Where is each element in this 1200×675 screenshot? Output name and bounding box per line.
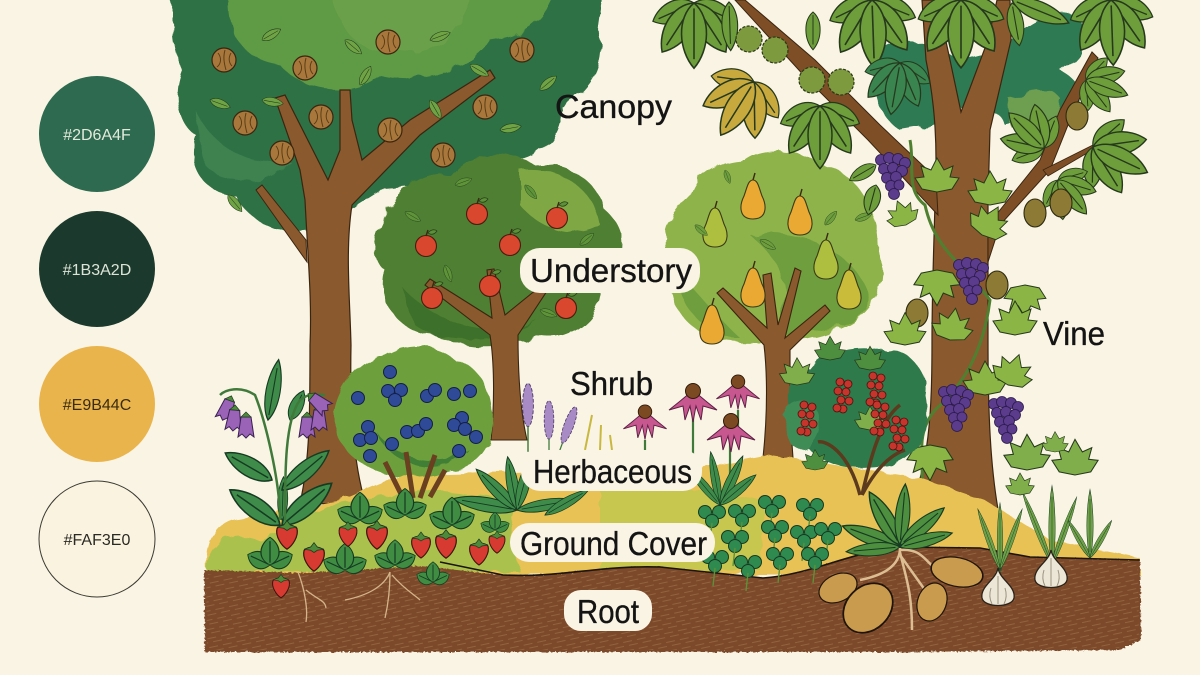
dark foliage behind tree bbox=[875, 14, 1085, 130]
pear tree crown bbox=[663, 151, 882, 343]
coneflower blooms bbox=[623, 375, 760, 452]
strawberry leaves bbox=[244, 489, 511, 587]
blueberry shrub bbox=[335, 346, 492, 498]
label: Herbaceous: Herbaceous bbox=[533, 453, 692, 490]
potato plant bbox=[814, 483, 986, 643]
swatch: #1B3A2D: #1B3A2D bbox=[63, 262, 131, 279]
strawberries bbox=[273, 521, 505, 598]
soil root layer bbox=[204, 547, 1141, 652]
clover ground cover bbox=[698, 496, 842, 591]
label: Canopy: Canopy bbox=[555, 88, 673, 125]
apple tree trunk bbox=[425, 269, 547, 440]
swatch: #FAF3E0 bbox=[39, 481, 155, 597]
swatch: #FAF3E0: #FAF3E0 bbox=[64, 532, 130, 549]
blueberry stems bbox=[385, 452, 445, 498]
label: Shrub: Shrub bbox=[570, 365, 653, 402]
red currant shrub bbox=[779, 336, 927, 495]
label: Root: Root bbox=[577, 593, 639, 630]
red currants bbox=[797, 372, 909, 451]
comfrey leaves bbox=[221, 358, 338, 533]
swatch: #E9B44C bbox=[39, 346, 155, 462]
small side twig bbox=[1043, 145, 1094, 176]
pear tree bbox=[663, 151, 882, 458]
upper left branch bbox=[735, 0, 938, 215]
currant stems bbox=[818, 405, 905, 495]
swatch: #2D6A4F: #2D6A4F bbox=[63, 127, 131, 144]
pear tree trunk bbox=[717, 268, 830, 458]
coneflowers bbox=[623, 375, 760, 509]
pears bbox=[700, 173, 861, 344]
herbaceous plant clump bbox=[452, 456, 591, 519]
comfrey stems bbox=[220, 389, 325, 520]
vine leaves bbox=[882, 158, 1046, 481]
label: Understory: Understory bbox=[530, 252, 693, 289]
apple tree crown bbox=[374, 155, 621, 346]
potato roots bbox=[860, 548, 945, 630]
small vine seedling leaves bbox=[1004, 432, 1098, 495]
chestnut and kiwi tree with vine bbox=[649, 0, 1165, 520]
apples bbox=[416, 198, 577, 318]
walnut tree crown bbox=[171, 0, 608, 231]
currant leaves bbox=[779, 336, 885, 470]
currant crown bbox=[783, 348, 927, 468]
swatch: #2D6A4F bbox=[39, 76, 155, 192]
colour swatches bbox=[39, 76, 155, 597]
potatoes bbox=[814, 552, 986, 643]
chestnuts bbox=[736, 26, 854, 95]
strawberry ground cover bbox=[244, 489, 511, 622]
understory apple tree bbox=[374, 155, 621, 440]
palmate leaves bbox=[649, 0, 1165, 234]
swatch: #1B3A2D bbox=[39, 211, 155, 327]
walnut tree trunk bbox=[275, 70, 495, 505]
potato plant leaves bbox=[840, 483, 954, 558]
garlic leaves bbox=[975, 486, 1114, 575]
garlic bulbs bbox=[982, 550, 1067, 606]
label: Ground Cover: Ground Cover bbox=[520, 525, 707, 562]
walnut tree leaves bbox=[209, 25, 559, 214]
blueberries bbox=[352, 366, 482, 462]
strawberry roots bbox=[298, 572, 420, 622]
large tree trunk bbox=[905, 0, 1011, 520]
apple tree leaves bbox=[403, 175, 602, 320]
canopy tree with walnuts bbox=[171, 0, 608, 505]
coneflower stems and leaves bbox=[639, 410, 759, 509]
garlic and onion plants bbox=[975, 432, 1114, 606]
comfrey herb with purple bells bbox=[215, 358, 338, 533]
label: Vine: Vine bbox=[1043, 315, 1105, 352]
pear tree leaves bbox=[693, 169, 873, 252]
lavender and grass bbox=[523, 383, 612, 466]
walnuts bbox=[212, 30, 534, 167]
right side branch bbox=[988, 52, 1098, 262]
comfrey bells bbox=[215, 388, 333, 438]
walnut tree left branch bbox=[256, 185, 307, 262]
kiwi fruits bbox=[906, 102, 1088, 327]
soil surface line bbox=[440, 547, 1140, 578]
swatch: #E9B44C: #E9B44C bbox=[63, 397, 131, 414]
vine stem bbox=[910, 140, 990, 505]
ground band bbox=[207, 455, 1140, 575]
blueberry crown bbox=[335, 346, 492, 476]
grape clusters bbox=[876, 152, 1024, 444]
